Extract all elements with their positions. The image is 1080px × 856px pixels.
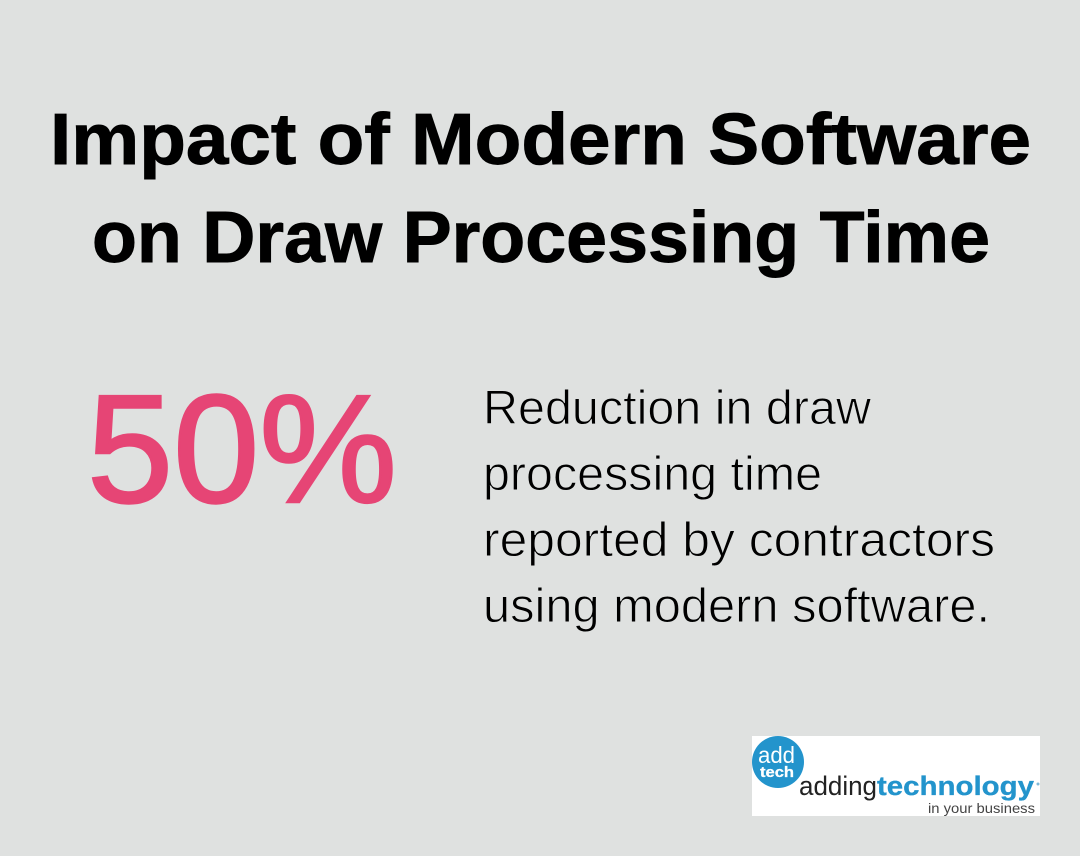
description text (483, 382, 995, 633)
title: Impact of Modern Software (50, 100, 1031, 180)
logo registered mark (1036, 782, 1040, 786)
icon: add tech circle (752, 736, 804, 788)
icon: add tech circle: tech (760, 764, 794, 781)
statistic: 50%: 50% (87, 363, 397, 535)
logo: adding technology (752, 736, 1040, 816)
description text: reported by contractors (483, 514, 995, 567)
title (50, 100, 1031, 278)
logo wordmark: adding (799, 771, 877, 801)
icon: add tech circle: add (758, 742, 795, 768)
description text: Reduction in draw (483, 382, 871, 435)
description text: using modern software. (483, 580, 990, 633)
logo wordmark: technology (877, 771, 1034, 801)
description text: processing time (483, 448, 822, 501)
logo tagline: in your business (928, 800, 1035, 816)
title: on Draw Processing Time (92, 198, 990, 278)
logo wordmark (799, 771, 1034, 801)
